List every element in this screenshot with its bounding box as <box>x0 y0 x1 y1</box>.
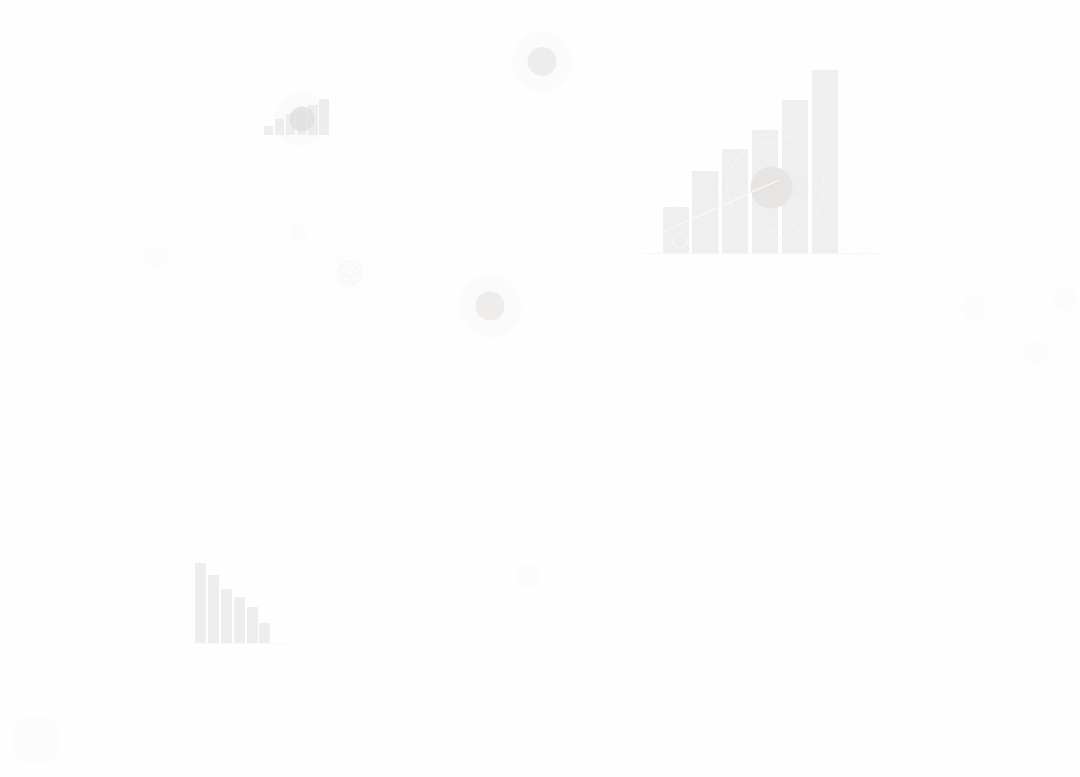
faint dots <box>12 224 1077 764</box>
trend line <box>663 180 779 232</box>
bars <box>663 70 838 253</box>
dotted rings <box>480 0 604 124</box>
halo <box>304 227 394 317</box>
baseline <box>642 252 883 254</box>
dotted ring: lower right <box>816 502 918 604</box>
ring <box>163 548 301 686</box>
node: top centre <box>480 0 604 124</box>
bars <box>195 563 270 643</box>
node: dotted sphere <box>304 227 394 317</box>
inner rings <box>718 134 824 240</box>
small ring <box>673 234 687 248</box>
dot pattern <box>790 177 808 195</box>
halo <box>512 32 572 92</box>
large bar chart <box>625 60 889 296</box>
outer rings <box>653 60 889 296</box>
node: small bar chart <box>249 68 353 172</box>
core circle <box>750 166 792 208</box>
halo <box>459 275 521 337</box>
node: centre <box>450 266 530 346</box>
core circle <box>528 47 556 76</box>
dotted rings <box>249 68 353 172</box>
core circle <box>476 292 504 320</box>
bottom bar chart <box>163 548 301 686</box>
halo <box>275 92 329 146</box>
core circle <box>290 106 314 132</box>
dot pattern <box>338 261 362 285</box>
dotted rings <box>450 266 530 346</box>
bars <box>264 99 329 135</box>
connector lines <box>345 122 640 350</box>
baseline <box>185 642 290 644</box>
